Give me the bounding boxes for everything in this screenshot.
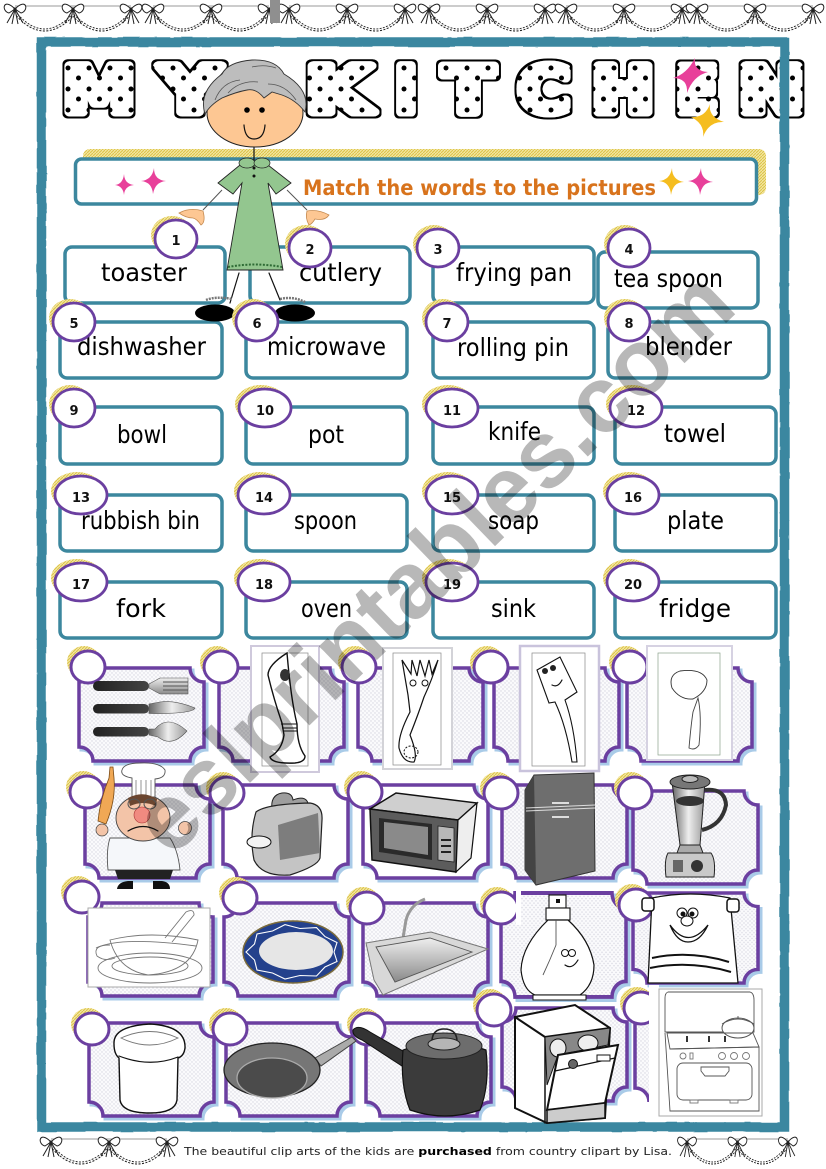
badge 10: 10 — [256, 404, 274, 419]
star: pink small — [115, 174, 134, 195]
badge 19 — [422, 559, 478, 601]
picture: microwave — [370, 793, 477, 872]
picture: chef with rolling pin — [96, 763, 192, 889]
badge 20 — [603, 559, 659, 601]
word boxes — [60, 247, 776, 638]
word labels: microwave — [267, 332, 386, 361]
badge 14: 14 — [255, 491, 273, 506]
watermark: eslprintables.com — [112, 249, 754, 874]
badge 4: 4 — [624, 243, 634, 258]
badge 18 — [234, 559, 290, 601]
badge 3: 3 — [433, 243, 443, 258]
badge 3 — [413, 225, 459, 267]
badge 9 — [49, 385, 95, 427]
answer circles — [61, 646, 659, 1120]
word labels: towel — [664, 419, 726, 448]
picture: ladle card — [647, 646, 732, 760]
badge 18: 18 — [255, 578, 273, 593]
badge 8 — [604, 299, 650, 341]
picture: frying pan — [224, 1037, 356, 1098]
badge 20: 20 — [624, 578, 642, 593]
word labels: plate — [667, 506, 724, 535]
title star: gold — [691, 104, 724, 137]
badge 13: 13 — [72, 491, 90, 506]
picture: plate — [243, 921, 343, 983]
word labels: oven — [301, 594, 352, 623]
picture: sink — [366, 899, 488, 995]
title: MY KITCHEN: Y — [159, 54, 222, 127]
title: MY KITCHEN: H — [592, 54, 654, 127]
star: gold — [659, 168, 684, 195]
word labels: pot — [308, 420, 344, 449]
title: MY KITCHEN: C — [518, 54, 570, 127]
title: MY KITCHEN — [63, 54, 804, 127]
badge 10 — [235, 385, 291, 427]
badge 4 — [604, 225, 650, 267]
word labels — [77, 258, 733, 623]
star: pink large — [141, 168, 166, 194]
top garland border — [4, 0, 824, 30]
picture: cutlery — [93, 678, 195, 741]
picture: towel — [642, 894, 739, 983]
badge 8: 8 — [624, 317, 634, 332]
badge 15 — [422, 472, 478, 514]
number badges — [49, 216, 662, 601]
picture: bowl and saucer card — [88, 908, 210, 987]
footer credit: The beautiful clip arts of the kids are purchased from country clipart by Lisa. — [183, 1145, 672, 1158]
star: pink right — [688, 168, 713, 195]
badge 5 — [49, 299, 95, 341]
title: MY KITCHEN: K — [306, 54, 374, 127]
picture frames — [79, 668, 760, 1118]
word labels: bowl — [117, 420, 167, 449]
picture: fridge — [525, 773, 595, 885]
word labels: blender — [645, 332, 733, 361]
badge 12: 12 — [627, 404, 645, 419]
picture: rubbish bin — [114, 1024, 185, 1113]
picture: oven card — [659, 989, 762, 1116]
word labels: cutlery — [299, 258, 382, 287]
instruction panel — [76, 149, 766, 204]
instruction text: Match the words to the pictures — [303, 176, 656, 200]
title: MY KITCHEN: E — [676, 54, 718, 127]
word labels: knife — [488, 417, 541, 446]
word labels: spoon — [294, 506, 357, 535]
picture: fork card — [383, 648, 452, 769]
title star: pink — [673, 58, 708, 93]
picture: pot — [353, 1027, 487, 1116]
word labels: sink — [491, 594, 536, 623]
badge 14 — [234, 472, 290, 514]
picture: spatula card — [520, 646, 599, 771]
picture: knife card — [251, 646, 319, 772]
badge 9: 9 — [69, 404, 79, 419]
badge 2: 2 — [305, 243, 315, 258]
word labels: fridge — [659, 594, 731, 623]
badge 13 — [51, 472, 107, 514]
grandmother character — [179, 60, 329, 322]
badge 19: 19 — [443, 578, 461, 593]
badge 11 — [422, 385, 478, 427]
bottom garland right — [678, 1137, 797, 1163]
picture: blender — [665, 775, 726, 877]
picture: dishwasher — [515, 1005, 618, 1123]
badge 6: 6 — [252, 317, 262, 332]
badge 2 — [285, 225, 331, 267]
word labels: tea spoon — [614, 264, 723, 293]
badge 1 — [151, 216, 197, 258]
title: MY KITCHEN: N — [739, 54, 804, 127]
badge 11: 11 — [443, 404, 461, 419]
word labels: dishwasher — [77, 332, 207, 361]
title: MY KITCHEN: I — [395, 54, 417, 127]
badge 16 — [603, 472, 659, 514]
word labels: rolling pin — [457, 333, 569, 362]
badge 7 — [422, 299, 468, 341]
badge 6 — [232, 299, 278, 341]
word labels: frying pan — [456, 258, 572, 287]
badge 7: 7 — [442, 317, 452, 332]
picture: soap bottle — [521, 895, 594, 1000]
badge 15: 15 — [443, 491, 461, 506]
badge 17 — [51, 559, 107, 601]
badge 1: 1 — [171, 234, 181, 249]
title: MY KITCHEN: M — [63, 54, 135, 127]
word labels: rubbish bin — [81, 506, 200, 535]
badge 12 — [606, 385, 662, 427]
title: MY KITCHEN: T — [443, 54, 494, 127]
badge 17: 17 — [72, 578, 90, 593]
badge 5: 5 — [69, 317, 79, 332]
word labels: soap — [488, 506, 539, 535]
word labels: fork — [116, 594, 167, 623]
picture: toaster — [247, 793, 322, 875]
word labels: toaster — [101, 258, 188, 287]
bottom garland left — [40, 1137, 178, 1163]
badge 16: 16 — [624, 491, 642, 506]
